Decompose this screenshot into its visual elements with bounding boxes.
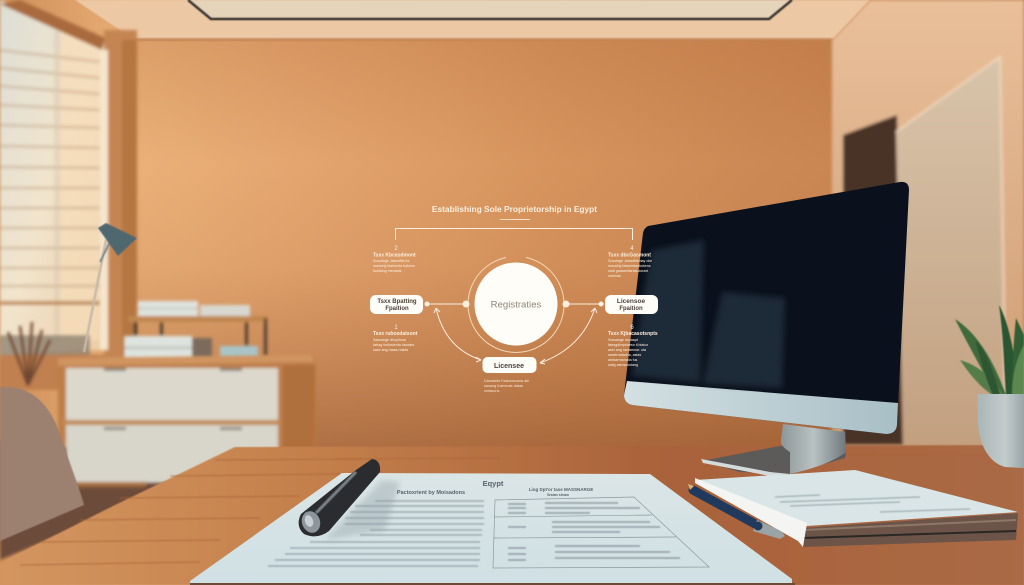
note 1: lower left: Tsxx rubosdatsont — [373, 331, 418, 337]
blue pen beside notebooks — [688, 484, 785, 539]
note 4: upper right: Sosstage Jatradfitsmay oke — [608, 259, 652, 263]
box: right: Fpaition — [619, 306, 643, 312]
office chair — [0, 387, 84, 541]
floor under the furniture — [0, 440, 240, 560]
document right table — [493, 497, 709, 568]
ceiling with recessed panel — [75, 0, 870, 41]
central ring — [468, 258, 564, 352]
floor lamp — [84, 223, 137, 352]
left and right connectors — [425, 301, 604, 307]
document left text lines — [268, 501, 484, 566]
diagram: sole proprietorship process — [370, 204, 658, 393]
box: left: Fpaition — [385, 306, 409, 312]
note 2: upper left — [373, 246, 416, 273]
curved arrows to the bottom box — [434, 308, 597, 364]
document left subtitle: Pactoxrient by Moisadons — [397, 490, 465, 496]
note 4: upper right: Tsxx dbcGasmont — [608, 252, 651, 258]
note 2: upper left: Sossitage Jatradfits for — [373, 259, 410, 263]
note 4: upper right: rastl gaaaantisrasuzoraxt — [608, 269, 648, 273]
document on the desk — [190, 473, 795, 585]
note: below bottom box: sasang fusmmas datas — [484, 384, 523, 388]
document heading: Eqypt — [483, 479, 504, 488]
note 4: upper right — [608, 246, 652, 278]
note: below bottom box — [484, 379, 529, 393]
note 2: upper left: 2 — [394, 246, 398, 252]
note 6: lower right: 6 — [630, 325, 634, 331]
note 6: lower right: watg asmsnostang — [608, 363, 638, 367]
note 4: upper right: maxxirig fastoentasbokens — [608, 264, 651, 268]
document right subtitle — [529, 487, 593, 497]
box: right: Licensoe — [617, 298, 645, 305]
box: bottom: Licensee — [494, 363, 524, 370]
screen reflection — [632, 240, 785, 388]
note 1: lower left: 1 — [394, 325, 398, 331]
note 6: lower right: Sossange mwasyd — [608, 338, 638, 342]
note 6: lower right — [608, 325, 658, 367]
stacked notebooks — [695, 470, 1018, 547]
monitor stand — [701, 424, 846, 476]
diagram title: Establishing Sole Proprietorship in Egypt — [432, 204, 597, 214]
note 1: lower left: tatrag fusfostenta danales — [373, 343, 415, 347]
pen shadow on document — [325, 480, 400, 540]
chest of drawers — [58, 355, 316, 487]
monitor body — [624, 182, 909, 434]
box: left: Tsxx Bpatting — [377, 299, 417, 305]
note 2: upper left: maxxirig fastoenta bokens — [373, 264, 415, 268]
desk surface — [0, 445, 1024, 585]
pen on the document — [299, 459, 380, 536]
title underline — [500, 218, 530, 220]
note 1: lower left: sase ang maas rostas — [373, 348, 408, 352]
box: left — [370, 295, 423, 314]
note 4: upper right: 4 — [630, 246, 634, 252]
plant on the window sill — [8, 322, 50, 385]
window with blinds and curtain — [0, 0, 137, 390]
box: right — [605, 295, 658, 314]
note 4: upper right: ontenas — [608, 274, 621, 278]
potted plant — [955, 305, 1024, 468]
shelf with books — [124, 301, 268, 360]
note 6: lower right: fatragdimpriaesn it biatoz — [608, 343, 648, 347]
note 6: lower right: aser ang rastarsnar. uta — [608, 348, 646, 352]
right wall with door — [832, 0, 1024, 450]
note 1: lower left — [373, 325, 418, 352]
box: bottom — [482, 357, 536, 373]
note 6: lower right: Tsxx Kjbacasotsnpts — [608, 331, 658, 337]
desktop monitor — [624, 182, 909, 476]
note 6: lower right: asticarrasrasta fus — [608, 358, 638, 362]
top bracket connector — [396, 228, 632, 240]
monitor chin — [624, 381, 898, 434]
note 2: upper left: busitang mentads — [373, 269, 402, 273]
document right subtitle: Sraian siman — [547, 493, 569, 497]
note 6: lower right: swattrnatadna, astas — [608, 353, 641, 357]
central ring: Registraties — [491, 300, 542, 310]
note 2: upper left: Tsxx Kbcasdmont — [373, 252, 416, 258]
note: below bottom box: Davalaria Fastansuana ale — [484, 379, 529, 383]
document table text — [508, 503, 680, 560]
note 1: lower left: Sassange dimpriona — [373, 338, 406, 342]
document right subtitle: Ling Dpt'or tase MASSNARGE — [529, 487, 593, 492]
note: below bottom box: ontasuns — [484, 389, 500, 393]
